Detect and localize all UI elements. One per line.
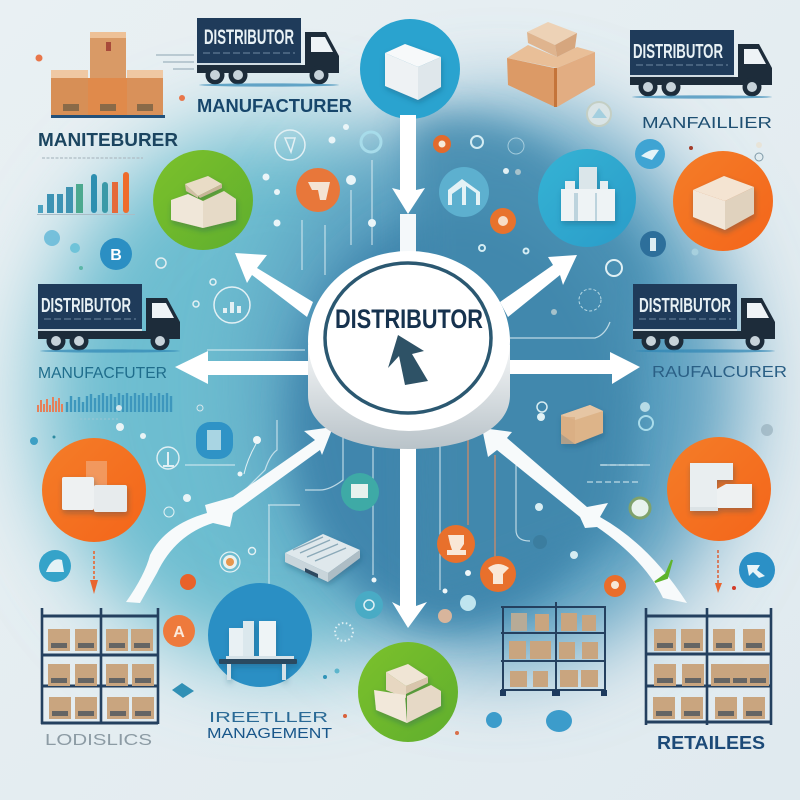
boxes: top left stack (51, 32, 165, 118)
label: manufacfuter: MANUFACFUTER (38, 365, 167, 382)
truck: top right (630, 30, 772, 99)
icon: blue badge top right (635, 139, 665, 169)
box: lower right small (561, 405, 603, 444)
label: irer retller management (207, 709, 332, 742)
truck: right: DISTRIBUTOR (639, 295, 731, 317)
arrow: top pointing down (392, 115, 425, 214)
truck: top right: DISTRIBUTOR (633, 41, 723, 63)
icon: blue badge left: B (110, 247, 122, 264)
arrow: lower left curved (126, 427, 333, 603)
icon: orange dashed pin left (90, 551, 98, 594)
arrow shaft: top to disc (400, 214, 416, 255)
icon: orange badge near shelves: A (173, 624, 185, 641)
bar chart: top left (37, 158, 143, 215)
boxes: top right stack (507, 22, 595, 107)
truck: top center (156, 18, 339, 87)
label: manfailler: MANFAILLIER (642, 115, 772, 132)
icon circle: orange tiny top (433, 135, 451, 153)
label: manufacturer top: MANUFACTURER (197, 96, 352, 116)
icon: teal monitor badge (341, 473, 379, 511)
label: maniteburer: MANITEBURER (38, 130, 178, 150)
icon circle: blue top with box (360, 19, 460, 119)
icon rings upper center right (471, 136, 622, 311)
truck: top center: DISTRIBUTOR (204, 26, 294, 49)
icon: blue badge lower left (39, 550, 71, 582)
icon: orange dashed pin right (715, 550, 736, 593)
icon: navy badge right (640, 231, 666, 257)
icon circle: teal right with building (538, 149, 636, 247)
central disc (308, 251, 510, 449)
icon circle: orange right lower with boxes (667, 437, 771, 541)
label: irer retller management: MANAGEMENT (207, 725, 332, 742)
icon circle: orange small upper left (296, 168, 340, 212)
small dots upper left (262, 124, 376, 227)
icons: lower right bubbles (438, 402, 773, 623)
icon circle: blue management (208, 583, 312, 687)
shelf: lower right (645, 608, 771, 725)
icon circle: pale blue factory (439, 167, 489, 217)
label: lodislics: LODISLICS (45, 732, 152, 749)
icon circle: orange lower 3 (604, 575, 626, 597)
disc title: DISTRIBUTOR (335, 304, 483, 334)
icon circle: orange right with box (673, 151, 773, 251)
icon circle: orange lower 2 (480, 556, 516, 592)
thin connector lines (185, 160, 650, 590)
small dots upper right (503, 142, 763, 315)
truck: left (38, 284, 180, 353)
icon circle: orange lower (437, 525, 475, 563)
shelf: lower middle (500, 602, 607, 696)
icon circle: orange medium (490, 208, 516, 234)
icon circle: green with boxes (358, 642, 458, 742)
label: retailees: RETAILEES (657, 733, 765, 753)
icon: blue badge left (44, 230, 166, 270)
icons: small lower center (172, 548, 383, 718)
arrow: bottom pointing down (392, 440, 427, 628)
icon circle: green with boxes (153, 150, 253, 250)
green tick on arrow (655, 560, 672, 582)
icon: pale ring top right (587, 102, 611, 126)
orange dots left (36, 54, 185, 101)
icon: orange badge near shelves (163, 615, 195, 647)
shelf: lower left (41, 608, 158, 724)
arrow: right (500, 352, 640, 384)
label: irer retller management: IREETLLER (209, 709, 328, 726)
truck: right (633, 284, 775, 353)
icon circle: orange left with boxes (42, 438, 146, 542)
blobs: bottom center (455, 710, 572, 735)
icons: lower left bubbles (30, 405, 261, 517)
orange connector lines (468, 436, 495, 560)
icon: blue badge right lower (739, 552, 775, 588)
arrow: upper right (500, 255, 577, 317)
bar chart: left lower (38, 393, 171, 419)
arrow: lower right curved (482, 428, 687, 603)
arrow: upper left (235, 253, 313, 317)
disc cursor arrow (388, 335, 428, 385)
icons: outline circles upper left (193, 130, 381, 323)
truck: left: DISTRIBUTOR (41, 295, 131, 317)
icon: pallet (285, 534, 360, 582)
arrow: left (175, 351, 320, 384)
label: raufalcurer: RAUFALCURER (652, 364, 787, 381)
